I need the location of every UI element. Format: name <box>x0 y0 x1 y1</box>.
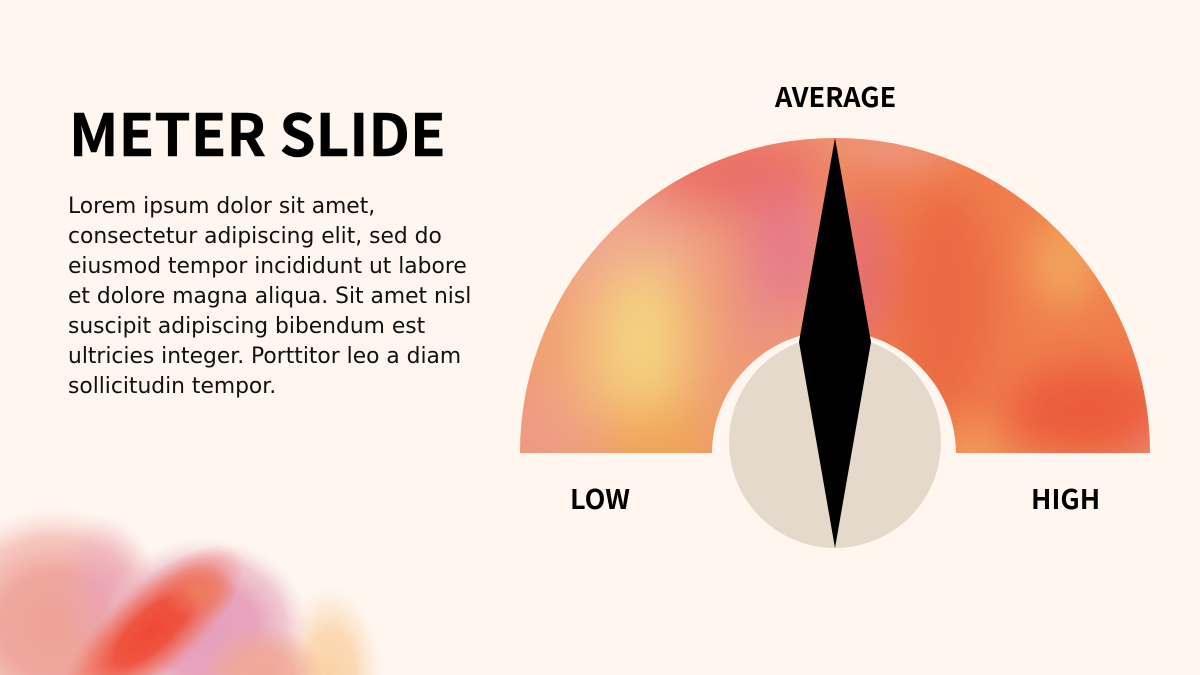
label: high: HIGH <box>1031 478 1100 517</box>
body text: et dolore magna aliqua. Sit amet nisl <box>68 284 471 309</box>
label: low: LOW <box>570 478 630 517</box>
gauge centre disc <box>729 336 941 548</box>
right hot zone <box>824 138 1150 453</box>
gauge arc <box>520 138 1150 453</box>
gauge needle <box>799 138 871 548</box>
body text: eiusmod tempor incididunt ut labore <box>68 254 467 279</box>
left warm zone <box>520 138 832 453</box>
title: METER SLIDE <box>69 89 446 173</box>
decorative gradient blob <box>0 490 400 675</box>
body text: suscipit adipiscing bibendum est <box>68 314 425 339</box>
body text: ultricies integer. Porttitor leo a diam <box>68 344 461 369</box>
label: average: AVERAGE <box>775 76 896 115</box>
body text: sollicitudin tempor. <box>68 374 276 399</box>
body text: consectetur adipiscing elit, sed do <box>68 224 442 249</box>
body text: Lorem ipsum dolor sit amet, <box>68 194 375 219</box>
body text <box>68 194 471 399</box>
